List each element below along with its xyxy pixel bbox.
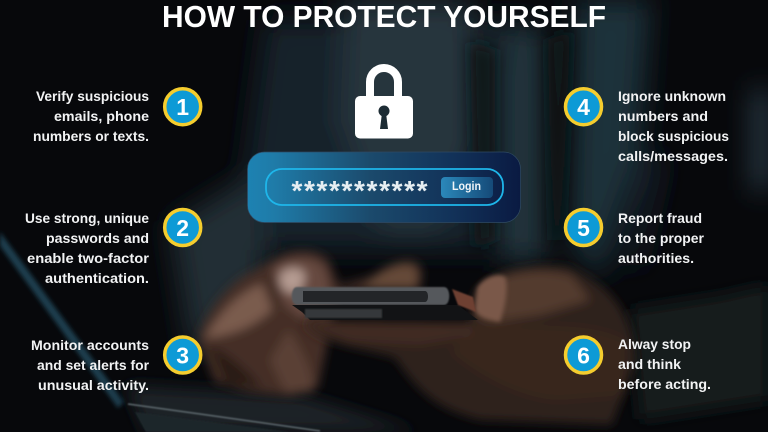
step 5 badge: 5: [577, 215, 590, 241]
sleeve: [630, 285, 768, 420]
step 2 text: authentication.: [45, 270, 149, 286]
password field: [266, 169, 503, 205]
laptop base: [125, 385, 420, 432]
step 3 text: unusual activity.: [38, 377, 149, 393]
step 6 text: Alway stop: [618, 336, 691, 352]
step 1 text: Verify suspicious: [36, 88, 149, 104]
login panel: [248, 152, 520, 222]
step 2 text: enable two-factor: [27, 250, 150, 266]
step 4 text: numbers and: [618, 108, 708, 124]
step 5 text: authorities.: [618, 250, 694, 266]
step 1 badge: [165, 89, 201, 125]
thumb: [475, 275, 507, 322]
step 3 text: and set alerts for: [37, 357, 150, 373]
step 6 badge: 6: [577, 342, 590, 368]
step 3 badge: [165, 337, 201, 373]
step 1 badge: 1: [176, 94, 189, 120]
title: HOW TO PROTECT YOURSELF: [162, 0, 606, 34]
step 5 badge: [566, 210, 602, 246]
step 3 text: Monitor accounts: [31, 337, 149, 353]
step 4 text: calls/messages.: [618, 148, 728, 164]
left hand: [198, 251, 422, 396]
step 4 badge: 4: [577, 94, 590, 120]
step 2 text: [25, 210, 150, 286]
step 3 badge: 3: [176, 342, 189, 368]
step 2 badge: [165, 210, 201, 246]
right hand: [304, 265, 636, 425]
step 6 text: [618, 336, 711, 392]
step 4 text: Ignore unknown: [618, 88, 726, 104]
step 5 text: Report fraud: [618, 210, 702, 226]
step 3 text: [31, 337, 150, 393]
icon: padlock: [355, 68, 413, 138]
step 4 badge: [566, 89, 602, 125]
step 2 badge: 2: [176, 215, 189, 241]
step 4 text: block suspicious: [618, 128, 729, 144]
login button: [441, 177, 493, 198]
step 1 text: emails, phone: [54, 108, 149, 124]
phone: [292, 287, 478, 320]
step 1 text: [33, 88, 149, 144]
step 2 text: Use strong, unique: [25, 210, 149, 226]
dark lapel shadows: [470, 30, 570, 250]
step 5 text: to the proper: [618, 230, 705, 246]
step 4 text: [618, 88, 729, 164]
laptop lid edge: [0, 232, 124, 408]
step 5 text: [618, 210, 705, 266]
step 1 text: numbers or texts.: [33, 128, 149, 144]
step 6 badge: [566, 337, 602, 373]
login button: Login: [452, 181, 481, 193]
password asterisks: ***********: [292, 175, 428, 206]
step 6 text: and think: [618, 356, 681, 372]
step 6 text: before acting.: [618, 376, 711, 392]
step 2 text: passwords and: [46, 230, 149, 246]
suit torso: [170, 0, 768, 350]
